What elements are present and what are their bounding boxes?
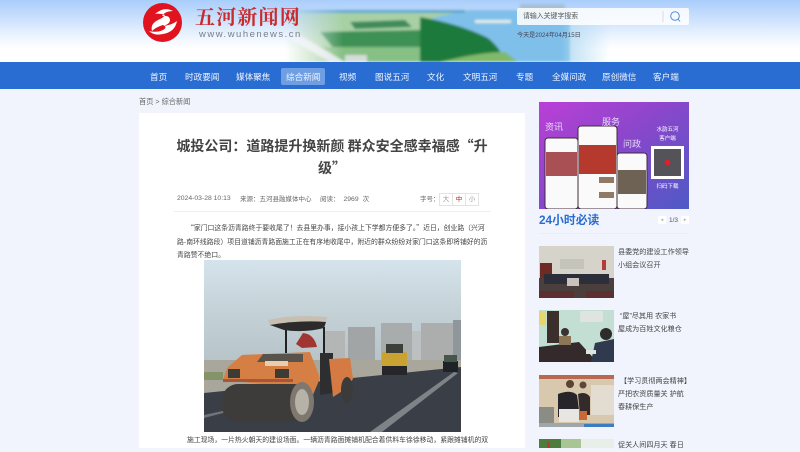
thumbnail title 3: 春耕保生产 — [618, 403, 653, 411]
article title — [176, 136, 488, 178]
search placeholder: 请输入关键字搜索 — [523, 13, 578, 20]
breadcrumb: 首页 > 综合新闻 — [139, 97, 190, 106]
banner label: client app: 水韵五河 — [656, 127, 678, 133]
nav: inquiry: 全媒问政 — [552, 72, 586, 82]
pager: ▸ — [684, 217, 686, 223]
nav: wechat: 原创微信 — [602, 72, 636, 82]
search box — [517, 8, 689, 25]
sidebar heading: 24小时必读 — [539, 213, 599, 227]
pager: ◂ — [661, 217, 663, 223]
font size switch — [439, 193, 479, 206]
nav: pictures: 图说五河 — [375, 72, 409, 82]
thumbnail title 1: 县委党的建设工作领导 — [618, 248, 689, 256]
panel: article — [139, 113, 525, 448]
article title: 城投公司：道路提升换新颜 群众安全感幸福感“升 — [176, 136, 488, 156]
header banner — [0, 0, 800, 62]
thumbnail title 3: 【学习贯彻两会精神】 — [620, 377, 691, 385]
article intro paragraph: 青路赞不绝口。 — [177, 249, 225, 259]
divider — [174, 211, 491, 212]
thumbnail title 4: 促关人间四月天 春日 — [618, 441, 684, 449]
thumbnail: reading room — [539, 310, 614, 362]
article intro paragraph: “家门口这条沥青路终于要收尾了！去县里办事，接小孩上下学都方便多了。”近日，创业路（兴河 — [187, 222, 485, 232]
thumbnail title 2 — [618, 312, 682, 333]
navigation bar — [0, 62, 800, 89]
article source: 来源：五河县融媒体中心 — [240, 193, 312, 203]
font size label: 字号： — [420, 193, 440, 203]
banner label: client app: 客户端 — [659, 136, 676, 142]
article date: 2024-03-28 10:13 — [177, 195, 231, 202]
article intro paragraph — [177, 222, 487, 259]
banner label: scan: 扫码下载 — [656, 184, 678, 190]
article photo: road roller — [204, 260, 461, 432]
font size switch: 小 — [469, 196, 475, 203]
nav: home: 首页 — [150, 72, 167, 82]
promo banner — [539, 102, 689, 209]
date: 今天是2024年04月15日 — [517, 32, 581, 39]
nav: topics: 专题 — [516, 72, 533, 82]
active nav highlight — [281, 68, 325, 85]
nav: civilization: 文明五河 — [463, 72, 497, 82]
nav: culture: 文化 — [427, 72, 444, 82]
logo title: 五河新闻网 — [195, 7, 301, 29]
font size switch: 大 — [443, 196, 449, 203]
nav: general news: 综合新闻 — [286, 72, 320, 82]
thumbnail title 3 — [618, 377, 691, 411]
article title: 级” — [318, 158, 346, 178]
pager — [658, 216, 689, 224]
thumbnail: meeting room — [539, 246, 614, 298]
article intro paragraph: 路-南环线路段）项目道铺沥青路面施工正在有序地收尾中，附近的群众纷纷对家门口这条即将铺好的沥 — [177, 236, 487, 246]
nav: video: 视频 — [339, 72, 356, 82]
banner label: news: 资讯 — [545, 122, 563, 132]
banner label: inquiry: 问政 — [623, 138, 641, 148]
banner label: service: 服务 — [602, 116, 620, 126]
nav: media: 媒体聚焦 — [236, 72, 270, 82]
thumbnail title 3: 严把农资质量关 护航 — [618, 390, 684, 398]
thumbnail title 1: 小组会议召开 — [618, 261, 661, 269]
nav: politics: 时政要闻 — [185, 72, 219, 82]
photo caption: 施工现场，一片热火朝天的建设场面。一辆沥青路面摊铺机配合着供料车徐徐移动，紧跟摊铺机的双 — [187, 434, 488, 444]
thumbnail title 2: “屋”尽其用 农家书 — [620, 312, 676, 320]
pager: 1/3 — [669, 217, 678, 224]
logo url: www.wuhenews.cn — [199, 29, 302, 40]
font size switch: 中 — [456, 196, 462, 203]
thumbnail: farm supply inspection — [539, 375, 614, 427]
banner label: client app — [656, 126, 678, 142]
divider — [539, 233, 689, 234]
icon: site logo — [143, 3, 182, 42]
article views: 阅读： 2969 次 — [320, 193, 369, 203]
icon: search — [662, 11, 680, 22]
thumbnail title 2: 屋成为百姓文化粮仓 — [618, 325, 682, 333]
nav: client: 客户端 — [653, 72, 679, 82]
thumbnail: green scene — [539, 439, 614, 448]
thumbnail title 1 — [618, 248, 689, 269]
